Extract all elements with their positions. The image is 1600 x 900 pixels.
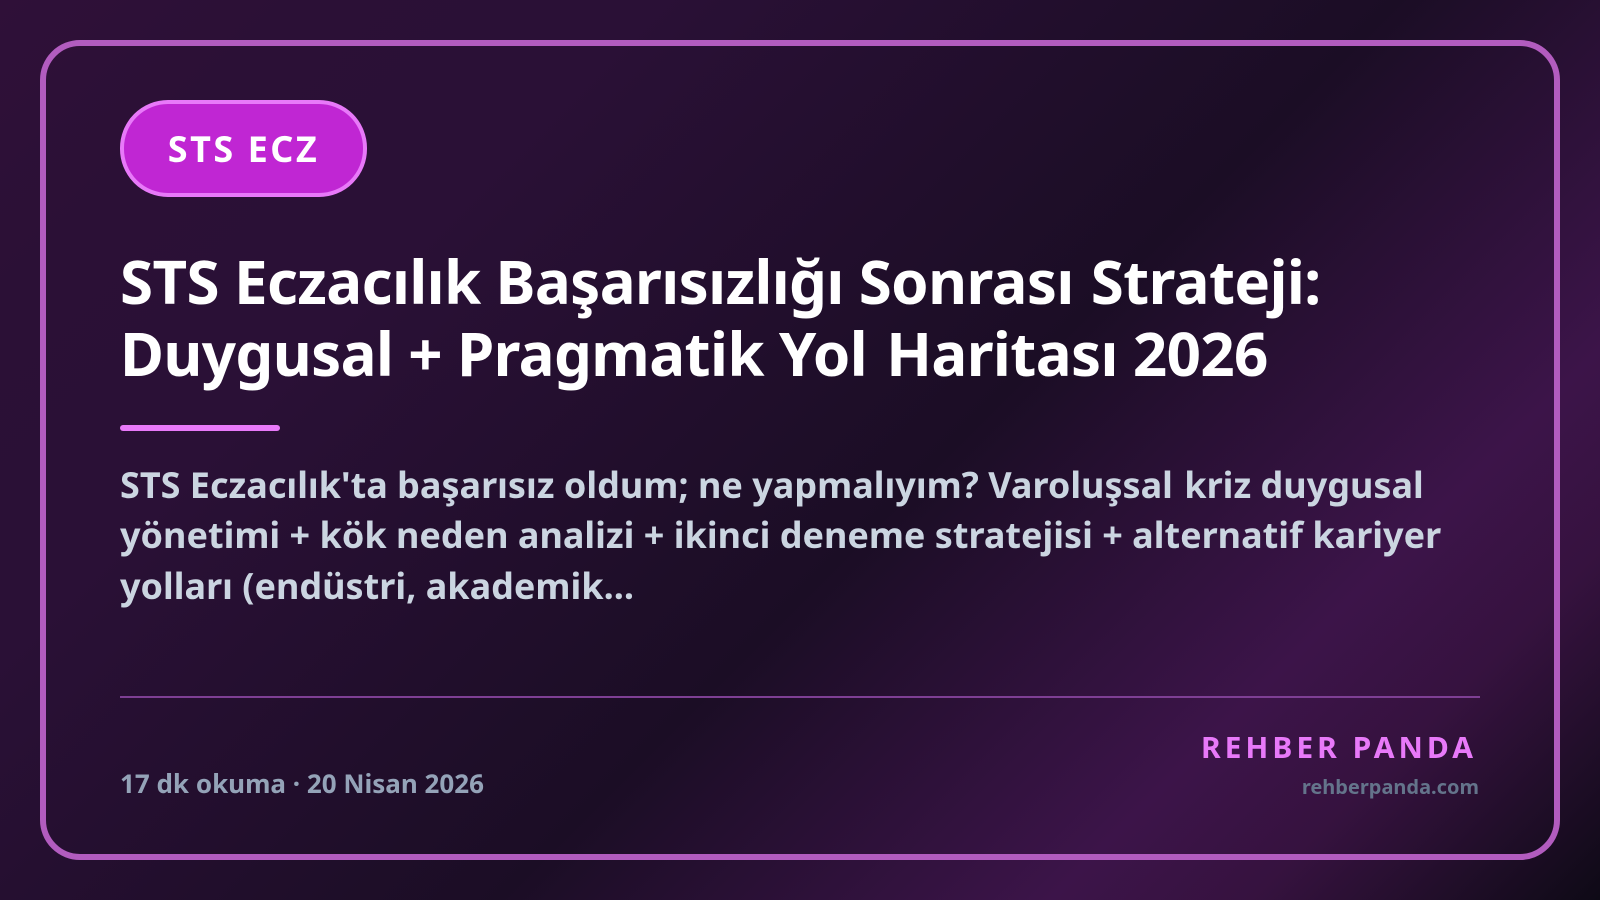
brand url: rehberpanda.com <box>1302 773 1479 800</box>
description <box>120 460 1441 610</box>
footer divider <box>120 696 1480 698</box>
description: yönetimi + kök neden analizi + ikinci deneme stratejisi + alternatif kariyer <box>120 510 1441 559</box>
category badge: STS ECZ <box>168 124 319 173</box>
accent rule <box>120 425 280 431</box>
brand name: REHBER PANDA <box>1201 726 1477 767</box>
title: Duygusal + Pragmatik Yol Haritası 2026 <box>120 312 1268 394</box>
title <box>120 240 1321 394</box>
category badge <box>120 100 367 197</box>
reading meta: 17 dk okuma · 20 Nisan 2026 <box>120 765 484 801</box>
title: STS Eczacılık Başarısızlığı Sonrası Strateji: <box>120 240 1321 322</box>
description: STS Eczacılık'ta başarısız oldum; ne yapmalıyım? Varoluşsal kriz duygusal <box>120 460 1424 509</box>
description: yolları (endüstri, akademik... <box>120 561 634 610</box>
